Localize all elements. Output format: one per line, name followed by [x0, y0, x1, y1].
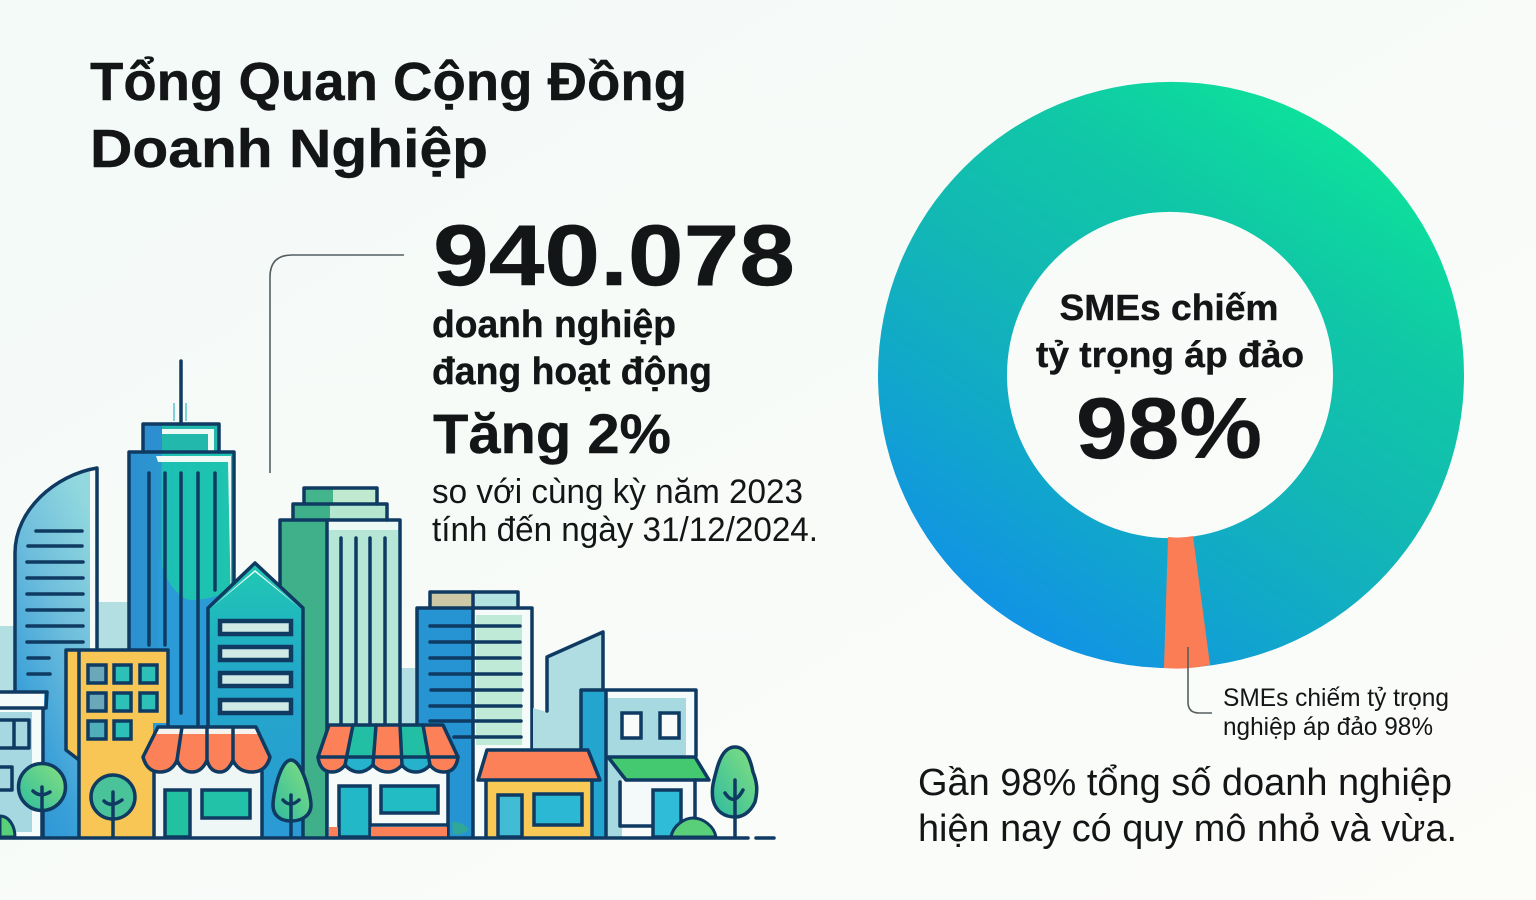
donut chart: SME share [878, 82, 1464, 669]
building: yellow block [66, 650, 168, 837]
label: active enterprises: doanh nghiệp [432, 304, 676, 346]
tree: right end [712, 747, 757, 837]
callout text [1223, 684, 1449, 741]
title [90, 52, 687, 179]
building: small white block at left edge [0, 692, 47, 837]
building: blue and white office [417, 592, 532, 837]
bush [671, 818, 716, 837]
callout text: nghiệp áp đảo 98% [1223, 713, 1433, 741]
connector line: headline to city [270, 255, 404, 473]
tree: teardrop [273, 760, 311, 837]
title: Doanh Nghiệp [90, 119, 488, 179]
donut centre label: SMEs chiếm [1060, 287, 1278, 328]
building: pale angled block [533, 632, 603, 750]
headline statistic: active enterprises [432, 208, 818, 549]
callout leader line [1188, 647, 1212, 713]
building: pitched-roof teal house [208, 563, 303, 837]
donut segment: remaining share [1164, 536, 1210, 669]
awning stripes [318, 725, 458, 772]
growth: Tăng 2%: Tăng 2% [433, 402, 671, 465]
growth note: tính đến ngày 31/12/2024. [432, 511, 818, 549]
building: curved tower [15, 468, 97, 837]
number: 940.078: 940.078 [433, 208, 795, 304]
donut centre label [1036, 287, 1304, 477]
shop: orange roof yellow house [478, 750, 600, 837]
donut centre label: 98% [1076, 381, 1262, 477]
shop: striped awning [318, 725, 469, 837]
label: active enterprises: đang hoạt động [432, 351, 712, 393]
building: green stepped tower [280, 488, 400, 837]
title: Tổng Quan Cộng Đồng [90, 52, 687, 112]
shop: orange awning [143, 727, 270, 837]
tree: round on yellow block [91, 775, 135, 837]
growth note: so với cùng kỳ năm 2023 [432, 473, 803, 511]
donut centre label: tỷ trọng áp đảo [1036, 334, 1304, 375]
building: tall central tower [129, 361, 234, 837]
summary text: hiện nay có quy mô nhỏ và vừa. [918, 808, 1457, 850]
bush: bottom-left corner [0, 816, 15, 837]
ground line [0, 836, 774, 840]
tree: round left [18, 764, 66, 837]
label: active enterprises [432, 304, 712, 393]
callout text: SMEs chiếm tỷ trọng [1223, 684, 1449, 712]
summary text [918, 762, 1457, 850]
background pale blocks [0, 602, 418, 728]
illustration: city skyline [0, 361, 774, 838]
shop: green awning block [580, 690, 709, 837]
summary text: Gần 98% tổng số doanh nghiệp [918, 762, 1452, 804]
growth note [432, 473, 818, 549]
donut ring: 98% segment [878, 82, 1464, 668]
